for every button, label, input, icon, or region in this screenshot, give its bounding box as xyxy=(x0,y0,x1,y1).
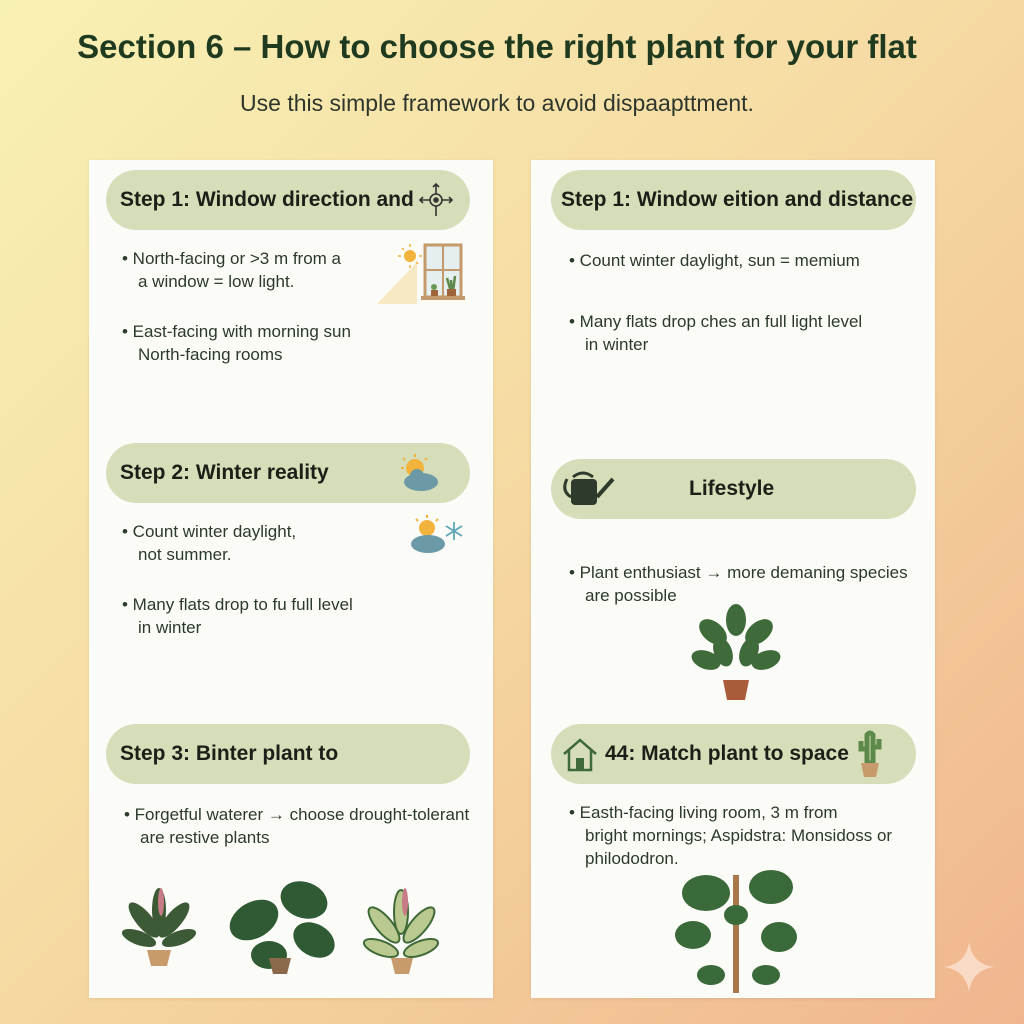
text: step 4 bullet: • Easth-facing living room, 3 m from xyxy=(569,803,838,822)
icon: leafy plant xyxy=(692,604,780,700)
subtitle: Use this simple framework to avoid dispaapttment. xyxy=(240,90,754,116)
text: step 3 bullet: • Forgetful waterer → choose drought-tolerant xyxy=(124,805,469,824)
text: step 4 bullet: bright mornings; Aspidstra: Monsidoss or xyxy=(585,826,892,845)
icon: watering can xyxy=(563,472,614,505)
heading: step 2 xyxy=(106,443,470,503)
text: right step 1 bullets xyxy=(569,251,862,354)
text: step 1 bullets: • North-facing or >3 m from a xyxy=(122,249,341,268)
text: step 1 bullets xyxy=(122,249,351,364)
text: step 2 bullets: • Many flats drop to fu full level xyxy=(122,595,353,614)
icon: compass xyxy=(419,183,453,216)
text: right step 1 bullets: • Many flats drop ches an full light level xyxy=(569,312,862,331)
heading: right step 1 xyxy=(551,170,916,230)
text: step 1 bullets: North-facing rooms xyxy=(138,345,283,364)
text: lifestyle bullet xyxy=(569,563,908,605)
title: Section 6 – How to choose the right plant for your flat xyxy=(77,28,917,65)
text: step 3 bullet: are restive plants xyxy=(140,828,269,847)
text: step 4 bullet xyxy=(569,803,892,868)
panel: right xyxy=(531,160,935,998)
icon: plants row xyxy=(122,881,439,974)
text: step 3 bullet xyxy=(124,805,470,847)
icon: cactus xyxy=(858,730,882,777)
heading: step 4 xyxy=(551,724,916,784)
text: step 2 bullets: in winter xyxy=(138,618,201,637)
heading: step 2: Step 2: Winter reality xyxy=(120,461,329,484)
heading: right step 1: Step 1: Window eition and distance xyxy=(561,188,913,211)
text: right step 1 bullets: • Count winter daylight, sun = memium xyxy=(569,251,860,270)
icon: window xyxy=(377,244,465,304)
text: step 1 bullets: a window = low light. xyxy=(138,272,294,291)
heading: step 1: Step 1: Window direction and xyxy=(120,188,414,211)
heading: step 3 xyxy=(106,724,470,784)
heading: step 3: Step 3: Binter plant to xyxy=(120,742,338,765)
heading: step 4: 44: Match plant to space xyxy=(605,742,849,765)
icon: sun snow xyxy=(411,515,462,553)
text: step 2 bullets xyxy=(122,522,353,637)
text: right step 1 bullets: in winter xyxy=(585,335,648,354)
text: step 4 bullet: philododron. xyxy=(585,849,679,868)
text: step 1 bullets: • East-facing with morning sun xyxy=(122,322,351,341)
heading: lifestyle: Lifestyle xyxy=(689,477,774,500)
icon: sun cloud xyxy=(401,454,438,491)
text: lifestyle bullet: • Plant enthusiast → more demaning species xyxy=(569,563,908,582)
text: lifestyle bullet: are possible xyxy=(585,586,677,605)
icon: sparkle xyxy=(944,942,994,992)
heading: lifestyle xyxy=(551,459,916,519)
icon: monstera xyxy=(675,870,797,993)
icon: house xyxy=(563,738,597,772)
heading: step 1 xyxy=(106,170,470,230)
text: step 2 bullets: not summer. xyxy=(138,545,232,564)
panel: left xyxy=(89,160,493,998)
text: step 2 bullets: • Count winter daylight, xyxy=(122,522,296,541)
